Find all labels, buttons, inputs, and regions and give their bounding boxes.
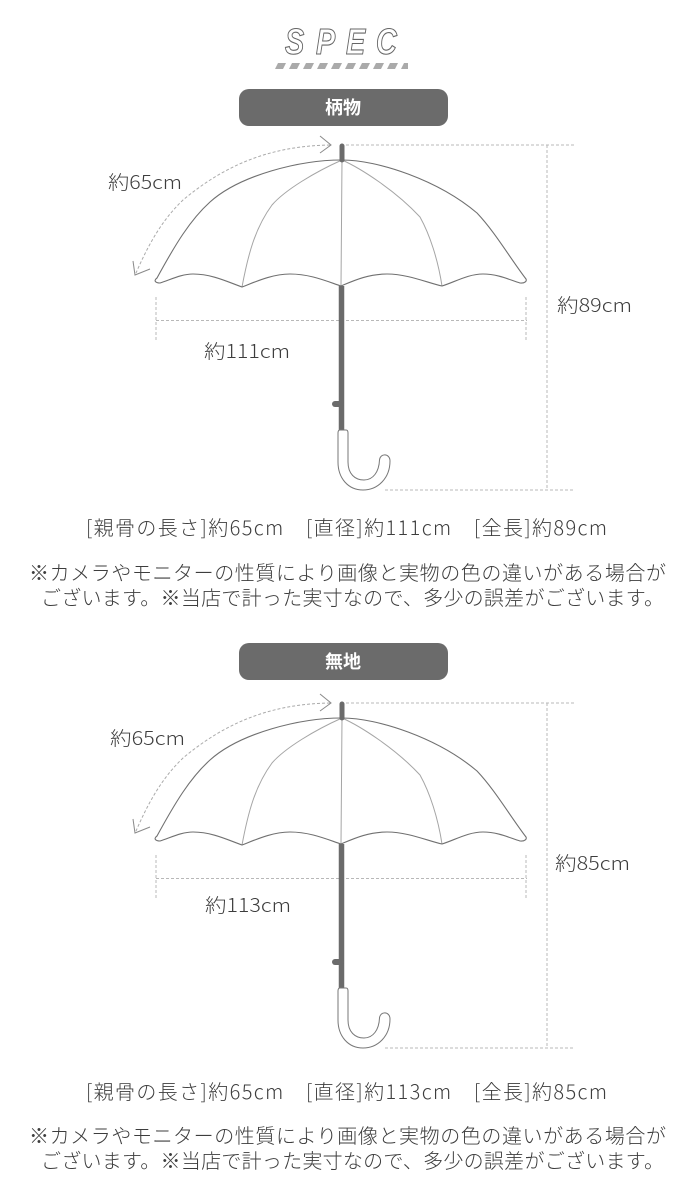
title: SPEC: E [346, 21, 366, 62]
note line 1: ※カメラやモニターの性質により画像と実物の色の違いがある場合が [29, 1120, 666, 1149]
note line 1: ※カメラやモニターの性質により画像と実物の色の違いがある場合が [29, 557, 666, 586]
label: diameter: 約111cm [204, 337, 290, 364]
title: SPEC [275, 21, 408, 69]
heading badge: 柄物 [239, 89, 448, 126]
spec summary: [親骨の長さ]約65cm [直径]約111cm [全長]約89cm [86, 512, 607, 541]
label: rib length: 約65cm [110, 724, 185, 751]
title: SPEC: S [285, 21, 304, 62]
title: SPEC: P [316, 21, 335, 62]
heading badge: 柄物: 柄物 [325, 94, 361, 120]
label: diameter: 約113cm [205, 891, 291, 918]
note line 2: ございます。※当店で計った実寸なので、多少の誤差がございます。 [41, 1145, 664, 1174]
label: rib length: 約65cm [108, 168, 182, 195]
title: SPEC: C [376, 21, 397, 62]
umbrella diagram: 無地 [133, 694, 575, 1048]
label: total length: 約89cm [557, 291, 632, 318]
umbrella diagram: 柄物 [133, 136, 575, 490]
heading badge: 無地 [239, 643, 448, 680]
note line 2: ございます。※当店で計った実寸なので、多少の誤差がございます。 [41, 582, 664, 611]
label: total length: 約85cm [555, 849, 630, 876]
heading badge: 無地: 無地 [325, 648, 361, 674]
spec summary: [親骨の長さ]約65cm [直径]約113cm [全長]約85cm [86, 1076, 607, 1105]
